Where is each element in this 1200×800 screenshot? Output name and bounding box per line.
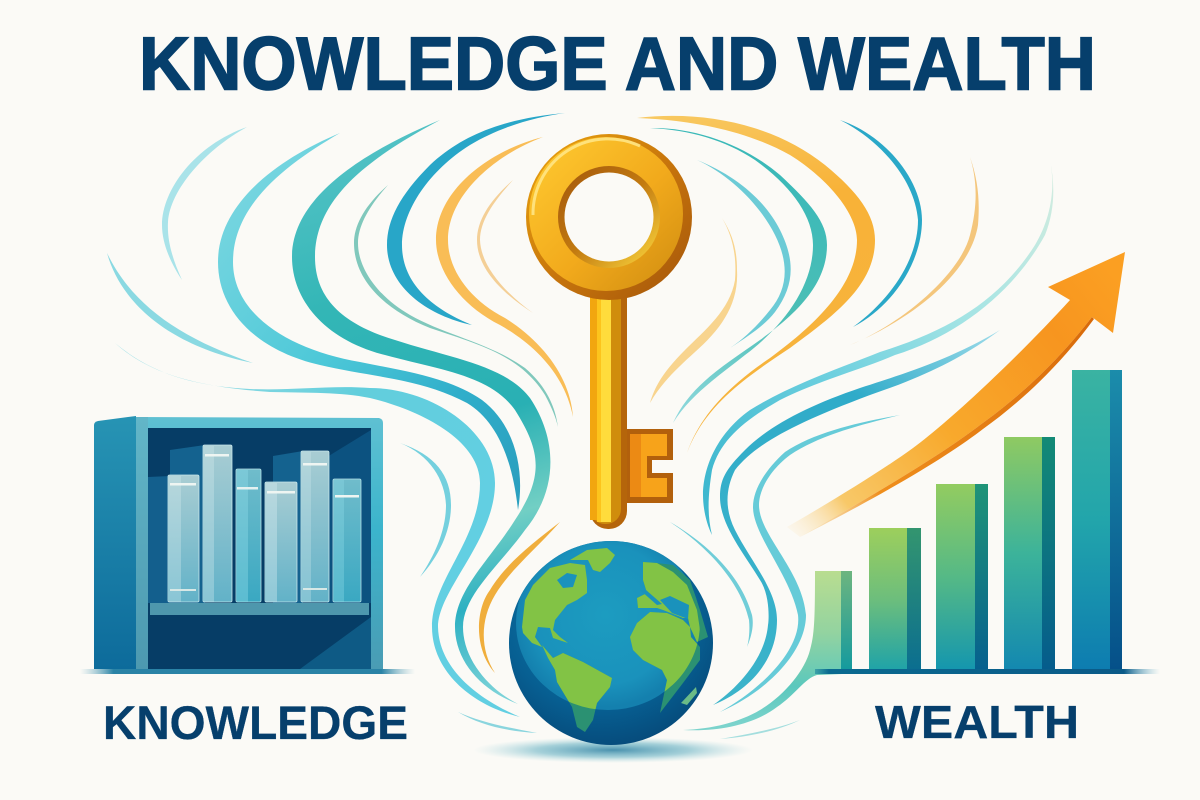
key bit xyxy=(627,429,673,503)
globe sphere xyxy=(509,541,713,745)
rising growth arrow xyxy=(787,252,1125,537)
label: knowledge: KNOWLEDGE xyxy=(103,696,408,749)
shelf front frame xyxy=(136,417,383,669)
golden key xyxy=(526,134,692,529)
africa xyxy=(630,612,698,692)
bookshelf: knowledge icon xyxy=(80,416,415,674)
key bow xyxy=(526,134,692,300)
bar 4 xyxy=(1004,437,1055,670)
shelf board xyxy=(150,603,369,615)
north america xyxy=(522,563,587,647)
eurasia xyxy=(637,562,706,642)
globe xyxy=(473,536,753,763)
continents: shaded side xyxy=(542,562,708,732)
bar 2 xyxy=(869,528,921,670)
growth swoosh into first bar xyxy=(683,571,842,730)
wealth bar chart xyxy=(683,370,1160,730)
key shaft xyxy=(590,280,627,529)
bar 5 xyxy=(1072,370,1122,670)
shelf side panel xyxy=(94,416,136,669)
books xyxy=(168,445,361,602)
swirling flow lines: left side xyxy=(107,113,573,733)
bar 3 xyxy=(936,484,988,670)
chart baseline xyxy=(815,669,1160,674)
south america xyxy=(542,645,612,710)
shelf interior xyxy=(148,428,371,669)
hudson bay and mediterranean xyxy=(557,573,689,619)
globe ground shadow xyxy=(473,737,753,763)
label: wealth: WEALTH xyxy=(875,696,1079,748)
madagascar xyxy=(681,687,697,705)
title: KNOWLEDGE AND WEALTH xyxy=(139,22,1096,106)
continents: lit side xyxy=(522,548,700,710)
greenland xyxy=(570,548,615,572)
shelf ground line xyxy=(80,669,415,674)
swirling flow lines: right side xyxy=(637,116,1053,739)
